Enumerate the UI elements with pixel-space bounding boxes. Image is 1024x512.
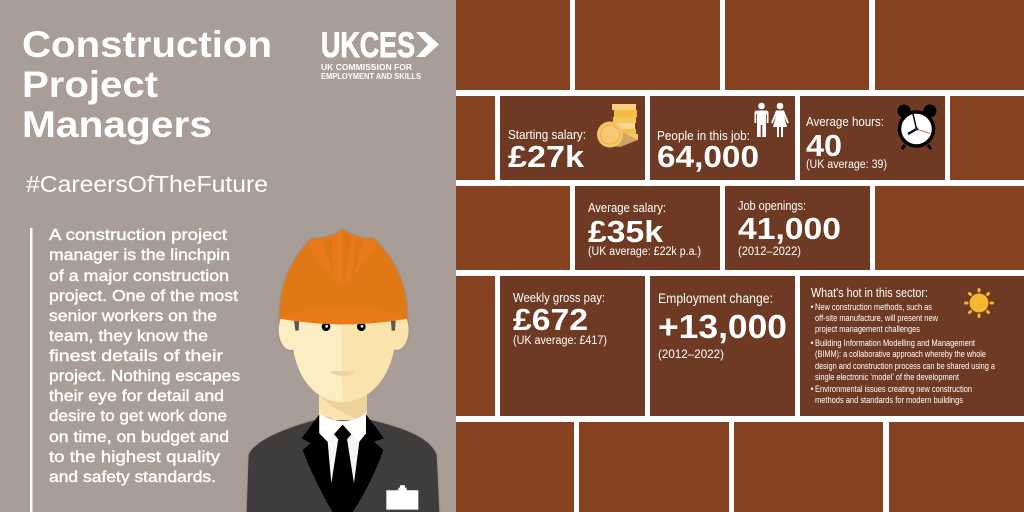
panel: left sidebar background (0, 0, 456, 512)
card: weekly gross pay: (UK average: £417) (513, 335, 607, 347)
card: job openings: Job openings: (738, 198, 806, 213)
right ear (385, 310, 409, 350)
bullet list: design and construction process can be shared using a (815, 361, 995, 371)
badge (386, 485, 418, 510)
card: starting salary: £27k (508, 139, 585, 174)
title: Project (22, 64, 158, 105)
brick wall background (456, 0, 1024, 512)
tie (331, 425, 354, 512)
card: average salary: £35k (588, 214, 664, 249)
bullet list: New construction methods, such as (815, 302, 932, 312)
logo: UKCES: UKCES (321, 26, 415, 65)
description text: of a major construction (49, 268, 229, 285)
card: people in this job: 64,000 (657, 139, 759, 174)
description text: senior workers on the (49, 308, 217, 325)
description text: to the highest quality (49, 449, 220, 466)
card: employment change: +13,000 (658, 308, 787, 345)
hair (293, 315, 396, 331)
title: Construction (22, 24, 272, 65)
bullet list: project management challenges (815, 324, 921, 334)
description text: on time, on budget and (49, 429, 229, 446)
description text: and safety standards. (49, 469, 216, 486)
icon: sun (966, 290, 992, 316)
icon: alarm clock (898, 104, 936, 149)
accent rule (30, 228, 32, 512)
card: starting salary: Starting salary: (508, 127, 586, 142)
description text: project. Nothing escapes (49, 368, 240, 385)
lapels (302, 414, 384, 512)
bullet list: methods and standards for modern buildings (815, 395, 964, 405)
description text: A construction project (49, 227, 228, 244)
neck (319, 387, 367, 420)
logo: UKCES (321, 26, 439, 81)
card: starting salary (500, 96, 645, 180)
soft shadow (247, 229, 439, 512)
card: average hours: Average hours: (806, 114, 884, 129)
card: average salary: Average salary: (588, 200, 666, 215)
card: average salary: (UK average: £22k p.a.) (588, 246, 701, 258)
card: average hours (800, 96, 945, 180)
description text (49, 227, 240, 486)
hard hat (280, 229, 407, 324)
description text: finest details of their (49, 348, 224, 365)
suit (247, 419, 439, 512)
bullet list: (BIMM): a collaborative approach whereby the whole (815, 349, 986, 359)
shirt (319, 413, 366, 483)
face left half (293, 313, 343, 402)
illustration: construction manager (247, 229, 439, 512)
description text: manager is the linchpin (49, 247, 230, 264)
ears (279, 310, 303, 350)
bullet list: off-site manufacture, will present new (815, 313, 939, 323)
logo: UKCES: EMPLOYMENT AND SKILLS (321, 71, 421, 81)
description text: desire to get work done (49, 408, 227, 425)
title: Managers (22, 104, 212, 145)
bullet list (810, 302, 995, 405)
icon: man and woman (754, 103, 789, 137)
card: people in this job: People in this job: (657, 128, 750, 143)
title (22, 24, 272, 145)
bullet list: Environmental issues creating new construction (815, 384, 972, 394)
card: job openings: 41,000 (738, 211, 841, 246)
bullet list: Building Information Modelling and Management (815, 338, 975, 348)
card: job openings: (2012–2022) (738, 246, 801, 258)
card: employment change (650, 276, 795, 416)
card: people in this job (650, 96, 795, 180)
card: weekly gross pay (500, 276, 645, 416)
hashtag: #CareersOfTheFuture (26, 171, 268, 197)
card: average hours: 40 (806, 128, 842, 163)
description text: team, they know the (49, 328, 208, 345)
face right half (343, 313, 394, 402)
card: average salary (575, 186, 720, 270)
bullet list: single electronic ‘model’ of the development (815, 372, 959, 382)
eyes (322, 322, 366, 331)
card: what's hot in this sector: What's hot in this sector: (811, 286, 928, 300)
description text: project. One of the most (49, 288, 239, 305)
card: average hours: (UK average: 39) (806, 159, 887, 171)
description text: their eye for detail and (49, 388, 224, 405)
card: employment change: (2012–2022) (658, 347, 724, 361)
card: what's hot in this sector (800, 276, 1024, 416)
eye highlights (325, 325, 363, 328)
icon: coins (597, 104, 638, 148)
card: weekly gross pay: £672 (513, 302, 588, 337)
card: weekly gross pay: Weekly gross pay: (513, 290, 605, 305)
card: job openings (725, 186, 870, 270)
mouth (330, 371, 356, 376)
bullet list: • (810, 384, 814, 394)
card: employment change: Employment change: (658, 291, 773, 306)
bullet list: • (810, 338, 814, 348)
logo: UKCES: UK COMMISSION FOR (321, 62, 412, 72)
bullet list: • (810, 302, 814, 312)
